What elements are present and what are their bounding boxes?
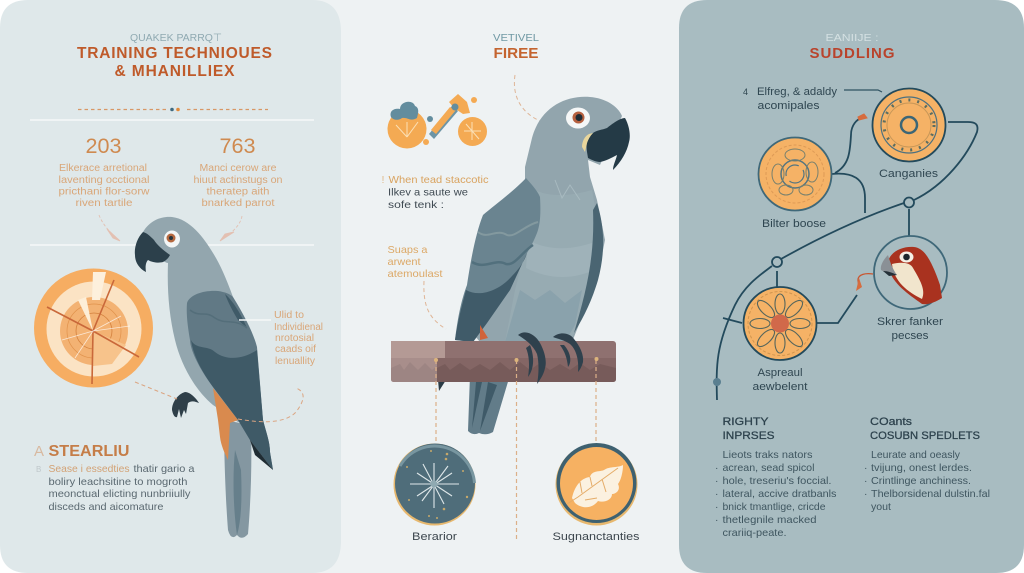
bullet list: · [715, 476, 718, 487]
panel: suddling [679, 0, 1024, 573]
label: aspreaul aewbelent: Aspreaul [758, 367, 802, 379]
heading: RIGHTY [722, 416, 769, 428]
label: canganies: Canganies [879, 168, 939, 180]
bullet list: acrean, sead spicol [722, 463, 814, 474]
foot [172, 392, 199, 418]
stat 763: theratep aith [206, 186, 270, 198]
text block: when tead: sofe tenk : [388, 199, 444, 211]
stat 203 [58, 135, 150, 209]
text block: suaps: atemoulast [388, 268, 443, 280]
title: firee: FIREE [494, 45, 538, 62]
callout: individual note: caads oif [275, 344, 316, 355]
label: berarior: Berarior [412, 531, 457, 543]
label: bilter boose: Bilter boose [762, 218, 826, 230]
bullet list [864, 450, 990, 513]
eyebrow: vetivel: VETIVEL [493, 32, 539, 44]
text block: when tead [382, 174, 488, 211]
claws [518, 332, 583, 384]
bullet list: bnick tmantlige, cricde [722, 502, 826, 513]
bullet list: crariiq-peate. [722, 528, 786, 539]
orange under-tail patch [213, 388, 238, 460]
bullet list: Leurate and oeasly [871, 450, 961, 461]
callout: individual note: Individienal [274, 322, 323, 333]
text block: stearliu: B [36, 465, 41, 474]
bullet list: · [715, 515, 718, 526]
bullet list [715, 450, 836, 539]
callout: individual note: nrotosial [275, 333, 314, 344]
label: skrer fanker pecses: Skrer fanker [877, 316, 943, 328]
eyebrow: eaniije: EANIIJE : [826, 33, 878, 44]
title: & MHANILLIEX [114, 63, 235, 80]
callout: individual note: lenuallity [275, 356, 315, 367]
stat 203: 203 [86, 135, 122, 158]
bullet list: yout [871, 502, 891, 513]
bullet list: · [864, 463, 867, 474]
wing [187, 291, 273, 470]
dashed path around parrot [135, 382, 303, 422]
arrow: stat 203 to parrot [99, 215, 120, 241]
note: elfreg: Elfreg, & adaldy [757, 86, 838, 98]
icon: canganies medallion [872, 88, 946, 162]
dashed connectors to badges [436, 360, 596, 540]
arrow: stat 763 to parrot [220, 216, 242, 241]
label: skrer fanker pecses: pecses [892, 330, 929, 342]
bullet list: Crintlinge anchiness. [871, 476, 971, 487]
eye [566, 108, 590, 128]
heading: INPRSES [722, 430, 774, 442]
stat 763: hiuut actinstugs on [194, 175, 282, 186]
column: righty inprses [715, 416, 836, 539]
bullet list: Thelborsidenal dulstin.fal [871, 489, 990, 500]
tail [468, 375, 510, 434]
left wing [455, 178, 540, 342]
connector network [717, 118, 978, 400]
text block: suaps: arwent [388, 256, 421, 268]
stat 203: riven tartile [76, 198, 133, 209]
text block: stearliu: meonctual elicting nunbriiully [48, 488, 191, 500]
bullet list: · [715, 463, 718, 474]
stat 203: pricthani flor-sorw [58, 186, 150, 198]
text block: stearliu: thatir gario a [134, 463, 195, 475]
connector nodes [713, 198, 914, 386]
bullet list: hole, treseriu's foccial. [722, 476, 832, 487]
dashed line to wing [424, 281, 446, 329]
body [143, 217, 263, 422]
title [77, 45, 272, 80]
beak [135, 232, 170, 272]
icon: orange bicycle [388, 94, 487, 148]
bullet list: · [715, 489, 718, 500]
icon: star burst badge [394, 444, 476, 526]
label: sugnanctanties: Sugnanctanties [552, 531, 640, 543]
heading: COSUBN SPEDLETS [870, 430, 980, 442]
label: skrer fanker pecses [877, 316, 943, 342]
bullet list: Lieots traks nators [722, 450, 812, 461]
heading: COants [870, 416, 913, 428]
column: coants cosubn [864, 416, 990, 513]
bullet list: · [864, 489, 867, 500]
label: aspreaul aewbelent: aewbelent [752, 381, 808, 393]
stat 203: Elkerace arretional [59, 163, 147, 174]
cere [582, 133, 593, 152]
stat 763 [194, 135, 282, 209]
heading: stearliu: A [34, 443, 44, 460]
dashed line from title to parrot [514, 75, 540, 121]
beak [587, 118, 630, 170]
bullet list: tvijung, onest lerdes. [871, 463, 972, 474]
heading: stearliu: STEARLIU [48, 443, 130, 460]
title: TRAINING TECHNIOUES [77, 45, 272, 62]
stat 763: 763 [220, 135, 256, 158]
bullet list: lateral, accive dratbanls [722, 489, 836, 500]
text block: stearliu: disceds and aicomature [48, 501, 164, 513]
text block: suaps: Suaps a [388, 244, 428, 256]
label: aspreaul aewbelent [752, 367, 808, 393]
perch [391, 341, 616, 382]
text block: when tead: When tead staccotic [388, 174, 488, 186]
stat 763: Manci cerow are [200, 163, 277, 174]
icon: leaf badge [556, 443, 638, 526]
text block: stearliu: Sease i essedties [48, 463, 130, 475]
icon: grey parrot front view [438, 97, 630, 434]
icon: grey parrot side view [135, 217, 273, 538]
right wing [574, 203, 603, 333]
tail [224, 420, 251, 538]
icon: bilter boose medallion [758, 138, 832, 210]
body [470, 97, 622, 342]
note: elfreg [743, 86, 882, 112]
bullet list: thetlegnile macked [722, 515, 817, 526]
icon: parrot portrait medallion [874, 236, 947, 309]
chart: orange radial wheel [34, 268, 153, 388]
callout: individual note: Ulid to [274, 310, 304, 321]
note: elfreg: acomipales [758, 100, 820, 112]
bullet list: · [864, 476, 867, 487]
orange flash [480, 325, 488, 340]
text block: suaps [388, 244, 443, 280]
callout: individual note [239, 310, 323, 367]
text block: stearliu [36, 463, 195, 513]
panel: training techniques [0, 0, 341, 573]
bullet list: · [715, 502, 718, 513]
text block: when tead: Ilkev a saute we [388, 186, 468, 198]
stat 763: bnarked parrot [202, 198, 275, 209]
orange connector arrows [856, 114, 873, 291]
note: elfreg: 4 [743, 87, 748, 97]
icon: aspreaul medallion [744, 287, 816, 360]
dashed divider with dots [78, 108, 268, 111]
panel: center [382, 32, 640, 543]
text block: stearliu: boliry leachsitine to mogroth [48, 476, 188, 488]
text block: when tead: ! [382, 174, 384, 186]
heading [722, 416, 774, 442]
stat 203: laventing occtional [58, 175, 150, 186]
eyebrow: quaker parrot: QUAKEK PARRQ⊤ [130, 32, 222, 44]
heading [870, 416, 980, 442]
eye [164, 230, 180, 248]
title: suddling: SUDDLING [810, 45, 894, 62]
